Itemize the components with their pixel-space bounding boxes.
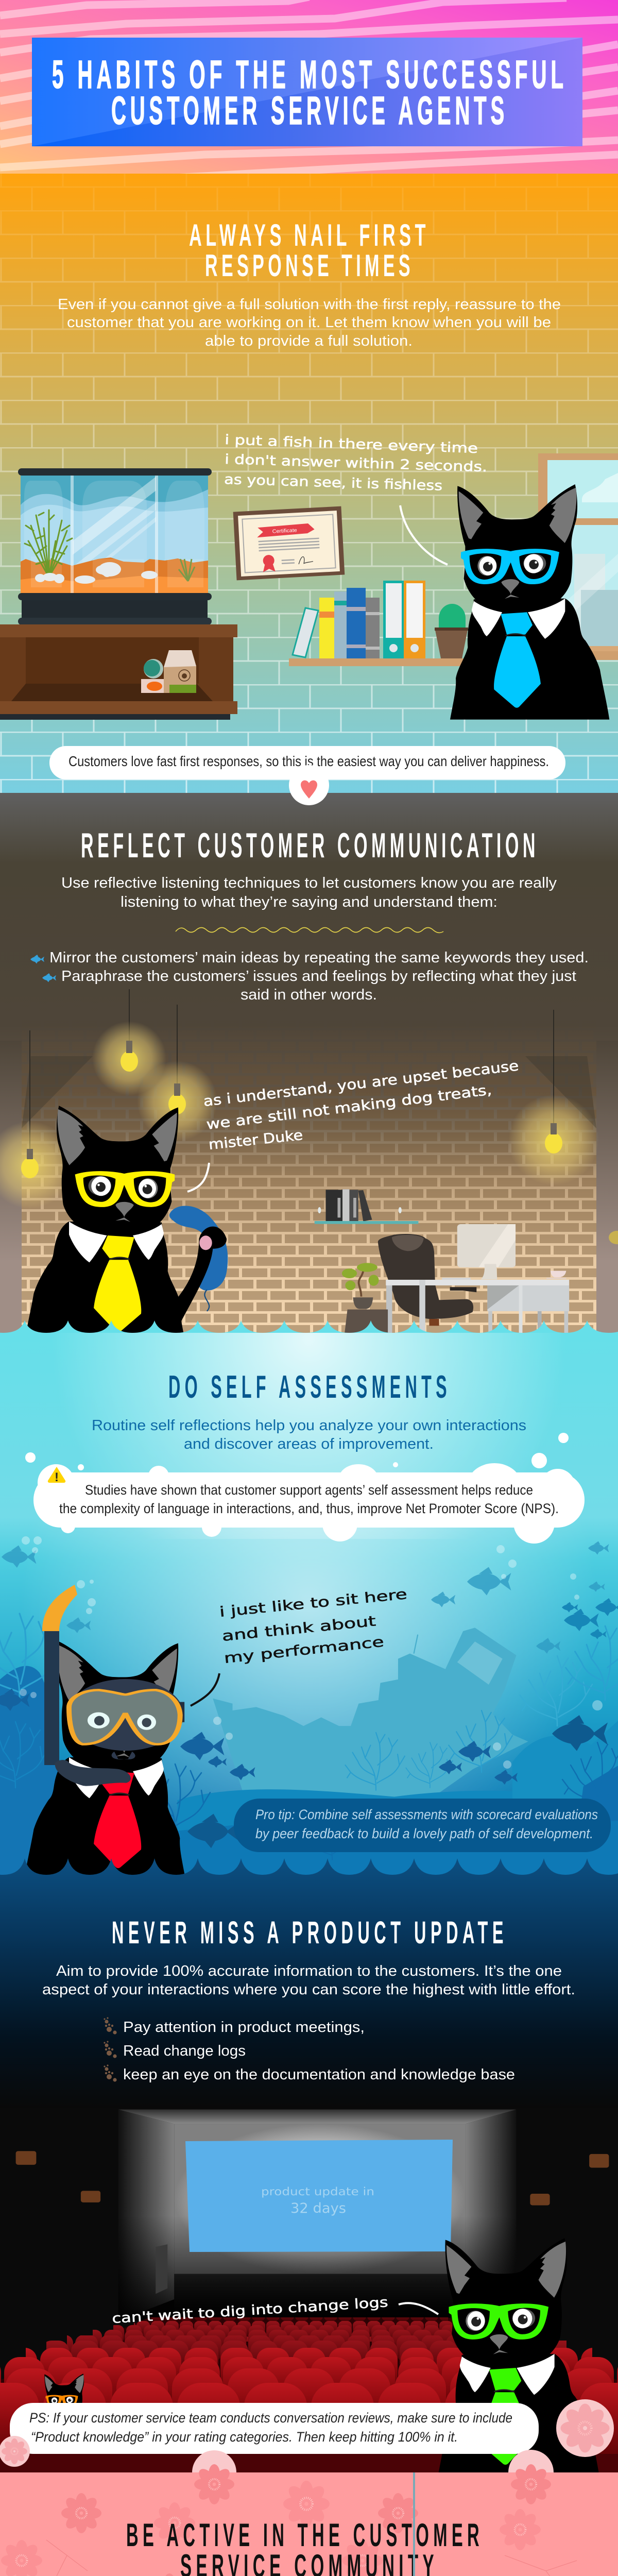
binders on glass shelf — [315, 1189, 418, 1224]
callout: product knowledge: PS: If your customer service team conducts conversation reviews, make sure to include — [29, 2410, 512, 2426]
heading: first response: ALWAYS NAIL FIRST — [189, 218, 430, 252]
wallpaper flowers — [0, 2464, 614, 2576]
screen countdown: product update in — [261, 2185, 374, 2198]
speech: fishless: i don't answer within 2 seconds. — [225, 452, 487, 475]
list: stay informed: Pay attention in product meetings, — [123, 2019, 365, 2036]
icon: diving mask and snorkel — [42, 1585, 184, 1786]
text block: reflective listening: listening to what they’re saying and understand them: — [121, 894, 497, 910]
list: reflective listening steps — [30, 950, 589, 1003]
books on shelf — [289, 581, 465, 666]
speech: change logs: can't wait to dig into change logs — [112, 2295, 388, 2327]
bonsai plant — [342, 1263, 388, 1334]
speech: dog treats: we are still not making dog treats, — [205, 1082, 493, 1133]
list: reflective listening steps: said in other words. — [241, 987, 377, 1003]
icon: cactus — [435, 604, 468, 658]
sunken ship — [213, 1628, 528, 1797]
callout: fast first responses — [49, 746, 565, 779]
office chair desk and monitor — [378, 1224, 569, 1335]
cat: snorkel and red tie — [24, 1585, 186, 1880]
list: stay informed: Read change logs — [123, 2043, 246, 2059]
cinema seats — [0, 2317, 618, 2472]
screen countdown — [185, 2140, 453, 2252]
callout: product knowledge: “Product knowledge” in your rating categories. Then keep hitting 100% in it. — [31, 2429, 458, 2445]
text block: first response advice: able to provide a full solution. — [205, 333, 413, 349]
text block: accurate information: Aim to provide 100% accurate information to the customers. It’s the one — [56, 1963, 562, 1979]
panel: never miss a product update — [0, 1858, 618, 2477]
speech: change logs — [112, 2295, 438, 2327]
title — [52, 53, 568, 133]
text block: accurate information: aspect of your interactions where you can score the highest with little effort. — [42, 1981, 575, 1998]
icon: fish bullet — [42, 973, 56, 982]
list: stay informed — [104, 2017, 515, 2083]
certificate: Certificate — [272, 528, 297, 535]
heading: community — [126, 2517, 484, 2576]
speech: fishless: as you can see, it is fishless — [224, 472, 442, 494]
list: reflective listening steps: Paraphrase the customers’ issues and feelings by reflecting what they just — [61, 968, 576, 985]
icon: flower bubbles — [0, 2399, 614, 2467]
panel: always nail first response times — [0, 174, 618, 793]
heading: first response — [189, 218, 430, 283]
cabinet — [0, 624, 237, 720]
cat: blue glasses — [450, 484, 609, 720]
speech tail — [400, 505, 448, 565]
speech tail — [191, 1673, 219, 1706]
bubbles — [20, 1536, 603, 1769]
heading: first response: RESPONSE TIMES — [205, 248, 414, 283]
callout: pro tip: by peer feedback to build a lovely path of self development. — [255, 1826, 593, 1841]
text block: routine self reflections: and discover areas of improvement. — [184, 1436, 434, 1452]
text block: routine self reflections — [92, 1417, 526, 1452]
cat: yellow glasses on the phone — [24, 1106, 228, 1344]
icon: warning: ! — [55, 1470, 59, 1484]
list: stay informed: keep an eye on the documentation and knowledge base — [123, 2066, 515, 2083]
icon: paws — [104, 2017, 117, 2035]
callout: cloud studies: Studies have shown that customer support agents’ self assessment helps reduce — [85, 1482, 533, 1498]
text block: reflective listening: Use reflective listening techniques to let customers know you are really — [61, 875, 557, 891]
text block: first response advice: customer that you are working on it. Let them know when you will be — [67, 314, 551, 331]
title box — [32, 38, 582, 146]
speech: dog treats — [202, 1058, 520, 1153]
icon: pet food and ball — [141, 650, 196, 693]
icon: telephone and raised paw — [165, 1206, 228, 1321]
header banner — [0, 0, 618, 180]
text block: routine self reflections: Routine self reflections help you analyze your own interactions — [92, 1417, 526, 1434]
text block: accurate information — [42, 1963, 575, 1998]
speech: dog treats: as i understand, you are upset because — [202, 1058, 520, 1110]
callout: cloud studies — [25, 1433, 585, 1544]
coral reef and seabed — [0, 1666, 618, 1876]
speech: dog treats: mister Duke — [208, 1127, 304, 1153]
callout: cloud studies: the complexity of language in interactions, and, thus, improve Net Promoter Score (NPS). — [59, 1501, 559, 1516]
hanging bulbs — [0, 989, 599, 1209]
panel: be active in the community — [0, 2450, 618, 2576]
screen countdown: 32 days — [290, 2200, 346, 2216]
speech tail — [187, 1163, 209, 1192]
cinema room — [16, 2110, 609, 2321]
window — [538, 453, 618, 660]
icon: paws — [104, 2041, 117, 2058]
text block: first response advice: Even if you cannot give a full solution with the first reply, reassure to the — [58, 296, 561, 313]
cat: small peeking with orange glasses — [42, 2374, 95, 2451]
text block: first response advice — [58, 296, 561, 349]
certificate — [233, 506, 345, 580]
wavy divider — [176, 927, 443, 933]
speech: sit here: my performance — [223, 1634, 385, 1667]
callout: pro tip — [234, 1799, 611, 1852]
panel: do self assessments — [0, 1320, 618, 1880]
icon: fish bullet — [30, 955, 44, 963]
speech: fishless — [224, 432, 487, 494]
speech: sit here — [219, 1586, 408, 1667]
icon: warning — [48, 1467, 65, 1484]
speech: sit here: and think about — [221, 1613, 376, 1645]
fish school — [0, 1541, 618, 1848]
aquarium — [18, 468, 212, 625]
panel: reflect customer communication — [0, 765, 618, 1344]
coral branches — [0, 1614, 618, 1860]
speech: fishless: i put a fish in there every time — [225, 432, 478, 456]
list: reflective listening steps: Mirror the customers’ main ideas by repeating the same keywords they used. — [49, 950, 589, 966]
text block: reflective listening — [61, 875, 557, 910]
cat: green glasses — [438, 2238, 599, 2477]
icon: hanging lamp — [381, 2472, 447, 2576]
icon: paws — [104, 2064, 117, 2082]
icon: bubble heart — [289, 765, 329, 805]
speech: sit here: i just like to sit here — [219, 1586, 408, 1620]
callout: product knowledge — [10, 2403, 539, 2454]
